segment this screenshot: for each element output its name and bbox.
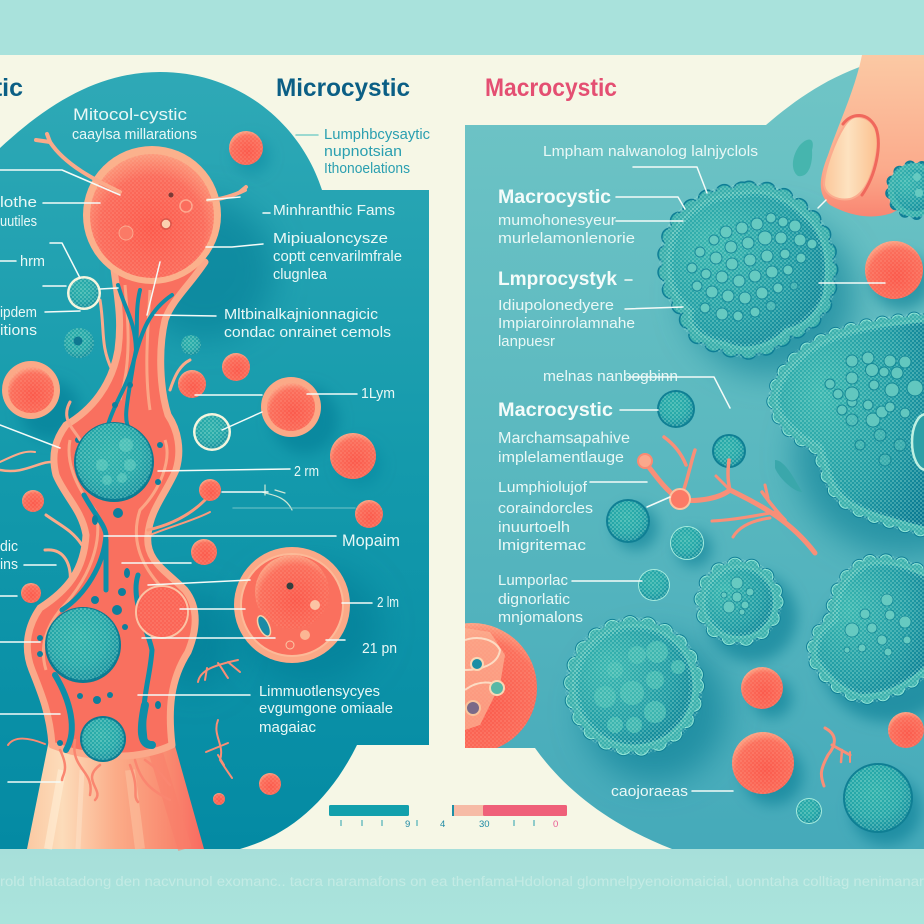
stem base [27,735,204,849]
labels: macrocystic: Macrocystic [498,400,613,421]
labels: macrocystic [498,143,758,800]
labels: macrocystic: Macrocystic [498,187,611,208]
vessel holes [37,382,163,746]
big coral cell: clipped left [465,623,537,748]
branch nodes [638,454,690,509]
leader lines: macrocystic [572,167,885,791]
labels: microcystic right column: ins [0,556,18,573]
teal cell: mid body [45,607,121,683]
medium macro cell: centre [702,565,776,639]
labels: macrocystic: dignorlatic [498,591,571,608]
bubbles [825,352,923,466]
labels: macrocystic: implelamentlauge [498,449,624,466]
tick labels: 4 [440,819,445,830]
footer caption: rold thlatatadong den nacvnunol exomanc.. tacra naramafons on ea thenfamaHdolonal glomnelpyenoiomaicial, uonntaha colltiag nenimanar [0,874,924,889]
labels: microcystic right column: evgumgone omiaale [259,700,393,717]
nail [824,117,878,199]
heading: microcystic: Microcystic [276,74,410,102]
labels: outside panel top: Ithonoelations [324,161,410,177]
medium macro cell: right [814,561,924,697]
labels: microcystic right column: magaiac [259,719,316,736]
labels: microcystic right column: dic [0,538,18,555]
coral cells: lower right [732,667,924,794]
thumb [821,55,924,216]
bubbles [687,213,817,321]
bar: macrocystic [452,805,567,816]
labels: microcystic right column: clugnlea [273,266,328,283]
labels: microcystic right column: 21 pn [362,640,397,657]
macrocystic illustration [407,140,924,845]
labels: microcystic upper: lothe [0,194,37,211]
small coral cells: left panel [2,131,383,805]
legend bars [329,805,567,830]
teal cell: lower body [80,716,126,762]
labels: microcystic right column: condac onrainet cemols [224,324,391,341]
labels: microcystic upper [0,105,197,339]
labels: macrocystic: inuurtoelh [498,519,570,536]
labels: macrocystic: mumohonesyeur [498,212,616,229]
vessel body [27,262,205,756]
small decorative branches [198,485,292,778]
root tendrils [60,740,170,802]
large coral cell [83,146,221,284]
teal flecks [775,140,813,492]
labels: macrocystic: mnjomalons [498,609,583,626]
leader lines: microcystic [0,135,372,782]
labels: macrocystic: caojoraeas [611,783,688,800]
ticks [341,820,534,826]
labels: macrocystic: melnas nanbogbinn [543,368,678,385]
labels: microcystic upper: caaylsa millarations [72,126,197,143]
labels: microcystic right column: coptt cenvarilmfrale [273,248,402,265]
heading: macrocystic: Macrocystic [485,74,617,102]
labels: microcystic right column: Mltbinalkajnionnagicic [224,306,379,323]
labels: microcystic upper: hrm [20,253,45,270]
labels: microcystic right column: Mopaim [342,531,400,550]
labels: macrocystic: Lumphiolujof [498,479,588,496]
cell in lower bulge [136,586,188,638]
vessel highlights [43,285,175,670]
labels: outside panel top: Lumphbcysaytic [324,127,430,143]
labels: macrocystic: Impiaroinrolamnahe [498,315,635,332]
labels: macrocystic: murlelamonlenorie [498,230,635,247]
large coral section cell [234,547,350,663]
labels: macrocystic: Marchamsapahive [498,430,630,447]
macro cell: large centre [666,190,829,350]
small teal cells: right panel [606,390,913,833]
labels: outside panel top [324,127,430,177]
tick labels: 0 [553,819,558,830]
labels: microcystic upper: itions [0,322,37,339]
macro cell: right of thumb [887,162,924,218]
labels: microcystic right column: Mipiualoncysze [273,230,388,247]
shadows [583,215,924,845]
tick labels [405,819,558,830]
labels: microcystic right column: 2 rm [294,463,319,480]
labels: macrocystic: lanpuesr [498,333,555,350]
coral cell: upper right [865,241,923,299]
labels: microcystic upper: uutiles [0,213,37,230]
labels: outside panel top: nupnotsian [324,144,402,160]
panel: macrocystic [465,55,924,849]
tick labels: 9 [405,819,410,830]
tick labels: 30 [479,819,490,830]
teal vessels [55,285,172,750]
labels: microcystic right column: 2 lm [377,594,399,611]
nail fold [843,115,878,195]
labels: macrocystic: Lmpham nalwanolog lalnjyclols [543,143,758,160]
coral branch [642,437,850,786]
labels: microcystic right column: 1Lym [361,385,395,402]
anatomical column [27,262,205,849]
macro cell: large right [774,318,924,532]
branches from large cell [0,134,246,745]
labels: microcystic upper: ipdem [0,304,37,321]
labels: macrocystic: Lmprocystyk [498,269,617,290]
labels: macrocystic: coraindorcles [498,500,593,517]
organelles [119,192,192,240]
teal cell: upper body [74,422,154,502]
labels: microcystic right column: Limmuotlensycyes [259,683,380,700]
panel: microcystic [0,72,429,849]
labels: macrocystic: Idiupolonedyere [498,297,614,314]
bottom band [0,849,924,924]
labels: microcystic right column: Minhranthic Fams [273,202,395,219]
labels: macrocystic: Lumporlac [498,572,568,589]
small teal cells: left panel [64,276,231,451]
labels: microcystic right column [0,202,402,736]
stem stripes [48,750,185,849]
labels: macrocystic: lmigritemac [498,537,587,554]
large macro cell: bottom [572,624,696,748]
bar: microcystic [329,805,409,816]
top band [0,0,924,55]
labels: microcystic upper: Mitocol-cystic [73,105,188,124]
